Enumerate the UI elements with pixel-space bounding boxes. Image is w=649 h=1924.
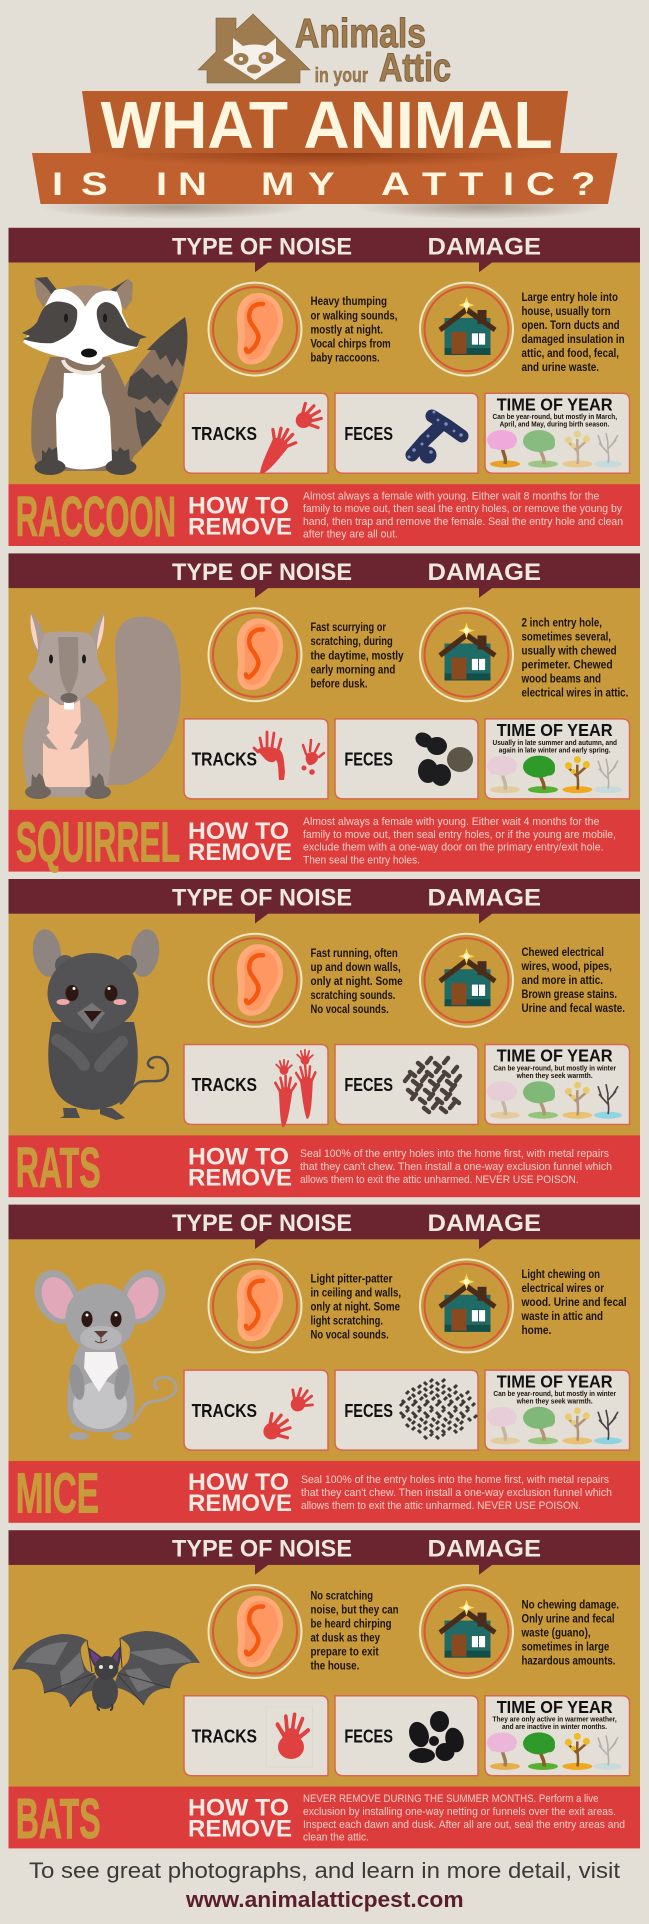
icon: squirrel [23,612,181,799]
heading: damage: DAMAGE [428,884,541,912]
section frame [8,1530,640,1848]
damage description: attic, and food, fecal, [522,348,619,360]
removal instructions: NEVER REMOVE DURING THE SUMMER MONTHS. Perform a live [303,1793,598,1805]
icon: house [440,297,496,355]
removal instructions [300,1148,612,1186]
how to remove label [188,1144,292,1192]
time of year note [492,738,617,754]
icon: mouse feces pellets [400,1379,477,1439]
time of year note: Can be year-round, but mostly in winter [493,1063,616,1072]
damage description: usually with chewed [522,646,617,658]
damage description: waste (guano), [521,1628,591,1640]
icon: house with raccoon face [198,14,310,83]
damage description [522,292,625,374]
animal name: SQUIRREL [16,810,180,874]
noise description: baby raccoons. [310,353,380,365]
time of year heading: TIME OF YEAR [497,1046,613,1066]
damage description: electrical wires in attic. [522,688,628,700]
damage description: 2 inch entry hole, [522,618,602,630]
damage description [521,618,628,700]
removal instructions: Seal 100% of the entry holes into the home first, with metal repairs [301,1474,609,1486]
season trees [487,1081,622,1119]
noise description: Fast scurrying or [310,622,386,634]
animal name: MICE [16,1462,99,1526]
damage description: Urine and fecal waste. [522,1003,625,1015]
removal instructions [303,1793,625,1844]
how to remove label [188,492,292,540]
website url: www.animalatticpest.com [185,1887,464,1912]
feces label: FECES [344,1075,393,1095]
noise description: Heavy thumping [310,296,387,308]
how to remove label: REMOVE [188,839,292,866]
time of year note: Can be year-round, but mostly in winter [493,1389,616,1398]
heading: damage: DAMAGE [428,1536,541,1563]
panel: bats section [8,1530,640,1851]
noise description: the house. [310,1661,359,1673]
how to remove label: REMOVE [188,1490,292,1517]
removal instructions: after they are all out. [303,528,398,540]
how to remove label [188,818,292,866]
how to remove label: HOW TO [188,818,289,845]
title line 1: WHAT ANIMAL [101,88,553,163]
icon: squirrel feces [413,729,473,786]
damage description: home. [522,1325,551,1337]
damage description: Light chewing on [522,1269,600,1281]
feces label: FECES [344,750,393,770]
removal instructions: clean the attic. [303,1832,369,1844]
icon: mouse tracks [257,1384,317,1448]
noise description: in ceiling and walls, [310,1288,401,1300]
noise description: before dusk. [310,678,368,690]
noise description: noise, but they can [310,1604,399,1616]
section frame [8,553,640,872]
damage description: open. Torn ducts and [522,320,620,332]
logo word: Animals: Animals [295,10,426,56]
time of year note: and are inactive in winter months. [502,1722,607,1731]
damage description: house, usually torn [522,306,610,318]
removal instructions: allows them to exit the attic unharmed. NEVER USE POISON. [301,1500,581,1512]
damage description: perimeter. Chewed [522,660,613,672]
how to remove label: REMOVE [188,513,292,540]
heading: damage: DAMAGE [428,233,541,260]
damage description: and urine waste. [522,362,599,374]
tracks label: TRACKS [192,1726,257,1746]
noise description: early morning and [310,664,395,676]
damage description: hazardous amounts. [522,1656,616,1668]
time of year heading: TIME OF YEAR [497,1697,613,1717]
panel: rats section [8,879,640,1200]
noise description: be heard chirping [310,1619,392,1631]
footer text [29,1858,621,1912]
icon: raccoon tracks [252,399,326,481]
heading: damage: DAMAGE [428,1210,541,1237]
icon: rat [30,927,168,1120]
damage description: wood beams and [521,674,601,686]
icon: bat tracks [266,1707,312,1767]
time of year note [492,412,617,429]
season trees [487,1732,622,1770]
removal instructions: exclude them with a one-way door on the primary entry/exit hole. [303,842,604,854]
icon: ear [237,944,283,1016]
footer line: To see great photographs, and learn in more detail, visit [29,1858,621,1883]
removal instructions [303,490,623,540]
noise description [310,622,404,690]
feces label: FECES [344,1726,393,1746]
noise description: No vocal sounds. [310,1330,389,1342]
noise description: or walking sounds, [310,310,397,322]
damage description: Large entry hole into [522,292,618,304]
damage description [521,1269,627,1337]
noise description: light scratching. [310,1316,383,1328]
noise description: mostly at night. [310,324,383,336]
time of year note [492,1715,617,1731]
time of year note [493,1063,616,1080]
title line 2: IS IN MY ATTIC? [52,166,595,202]
heading: type of noise: TYPE OF NOISE [172,233,352,260]
removal instructions: Inspect each dawn and dusk. After all are out, seal the entry areas and [303,1819,625,1831]
damage description: No chewing damage. [522,1600,619,1612]
noise description: Fast running, often [310,948,398,960]
noise description: No vocal sounds. [310,1004,389,1016]
noise description: No scratching [310,1590,373,1602]
animal name: BATS [16,1787,101,1851]
feces label: FECES [344,424,393,444]
tracks label: TRACKS [192,1075,257,1095]
feces label: FECES [344,1401,393,1421]
how to remove label [188,1795,292,1843]
removal instructions: allows them to exit the attic unharmed. NEVER USE POISON. [300,1174,579,1186]
noise description: up and down walls, [310,962,401,974]
icon: mouse [26,1263,176,1440]
heading: type of noise: TYPE OF NOISE [172,1536,352,1563]
removal instructions [301,1474,612,1512]
section frame [8,879,640,1197]
removal instructions: hand, then trap and remove the female. Seal the entry hole and clean [303,516,623,528]
banner shadows [40,195,605,219]
ribbon fold shadow [133,153,518,164]
icon: ear [237,618,283,690]
heading: type of noise: TYPE OF NOISE [172,884,352,912]
icon: ear [237,1596,283,1667]
damage description: Chewed electrical [522,947,604,959]
noise description: the daytime, mostly [310,650,404,662]
removal instructions: that they can't chew. Then install a one-way exclusion funnel which [300,1161,612,1173]
damage description [521,1600,619,1668]
logo: animals in your attic [198,10,451,90]
time of year heading: TIME OF YEAR [497,720,613,740]
removal instructions: Then seal the entry holes. [303,854,420,866]
damage description: Only urine and fecal [522,1614,615,1626]
noise description: prepare to exit [310,1647,379,1659]
removal instructions: exclusion by installing one-way netting or funnels over the exit areas. [303,1806,616,1818]
icon: ear [237,1270,283,1341]
damage description: damaged insulation in [522,334,625,346]
icon: raccoon [22,277,187,475]
section frame [8,1205,640,1523]
time of year heading: TIME OF YEAR [497,394,613,414]
how to remove label: HOW TO [188,492,289,519]
season trees [487,1407,622,1444]
removal instructions: family to move out, then seal entry holes, or if the young are mobile, [303,829,616,841]
noise description: scratching, during [310,636,393,648]
removal instructions: Seal 100% of the entry holes into the home first, with metal repairs [300,1148,609,1160]
noise description: Vocal chirps from [310,338,391,350]
icon: rat feces pellets [405,1058,460,1112]
icon: ear [237,293,283,364]
time of year note: when they seek warmth. [516,1071,593,1080]
how to remove label: HOW TO [188,1795,289,1822]
time of year note: again in late winter and early spring. [499,745,610,754]
panel: squirrel section [8,553,640,874]
noise description: only at night. Some [310,1302,400,1314]
icon: rat tracks [275,1050,319,1127]
time of year note: April, and May, during birth season. [500,420,609,429]
damage description: electrical wires or [522,1283,604,1295]
how to remove label: HOW TO [188,1469,289,1496]
season trees [487,430,622,468]
logo word: in your: in your [315,65,368,87]
icon: squirrel tracks [254,732,324,780]
logo word: Attic: Attic [379,46,451,90]
tracks label: TRACKS [192,424,257,444]
icon: house [440,1274,496,1332]
banner: top ribbon [82,91,568,154]
icon: house [440,948,496,1006]
damage description: and more in attic. [522,975,603,987]
icon: house [440,622,496,680]
panel: raccoon section [8,228,640,549]
section frame [8,228,640,546]
noise description [310,1274,401,1342]
icon: bat feces [406,1711,466,1763]
icon: house [440,1600,496,1658]
removal instructions: Almost always a female with young. Either wait 4 months for the [303,816,599,828]
time of year note: Can be year-round, but mostly in March, [492,412,617,421]
icon: raccoon feces [408,410,463,464]
removal instructions: Almost always a female with young. Either wait 8 months for the [303,490,599,502]
heading: damage: DAMAGE [428,559,541,586]
animal name: RATS [16,1136,101,1200]
noise description: scratching sounds. [310,990,395,1002]
damage description: wires, wood, pipes, [521,961,612,973]
noise description: Light pitter-patter [310,1274,393,1286]
tracks label: TRACKS [192,1401,257,1421]
damage description: waste in attic and [521,1311,603,1323]
animal name: RACCOON [16,485,176,549]
time of year note [493,1389,616,1406]
tracks label: TRACKS [192,750,257,770]
removal instructions: that they can't chew. Then install a one-way exclusion funnel which [301,1487,612,1499]
how to remove label: HOW TO [188,1144,289,1170]
heading: type of noise: TYPE OF NOISE [172,559,352,586]
noise description [310,948,403,1016]
noise description [310,1590,399,1673]
damage description: wood. Urine and fecal [521,1297,627,1309]
damage description [521,947,625,1015]
time of year note: Usually in late summer and autumn, and [492,738,617,747]
noise description [310,296,397,365]
noise description: at dusk as they [310,1633,381,1645]
time of year note: when they seek warmth. [516,1396,593,1406]
how to remove label [188,1469,292,1517]
damage description: sometimes in large [522,1642,609,1654]
panel: mice section [8,1205,640,1526]
banner: lower ribbon [32,153,618,204]
noise description: only at night. Some [310,976,403,988]
removal instructions [303,816,616,866]
time of year note: They are only active in warmer weather, [492,1715,617,1724]
removal instructions: family to move out, then seal the entry holes, or remove the young by [303,503,622,515]
heading: type of noise: TYPE OF NOISE [172,1210,352,1237]
time of year heading: TIME OF YEAR [497,1371,613,1391]
icon: bat [12,1631,200,1710]
how to remove label: REMOVE [188,1816,292,1843]
damage description: sometimes several, [522,632,611,644]
how to remove label: REMOVE [188,1164,292,1192]
season trees [487,756,622,793]
damage description: Brown grease stains. [522,989,617,1001]
title banner [32,88,618,219]
